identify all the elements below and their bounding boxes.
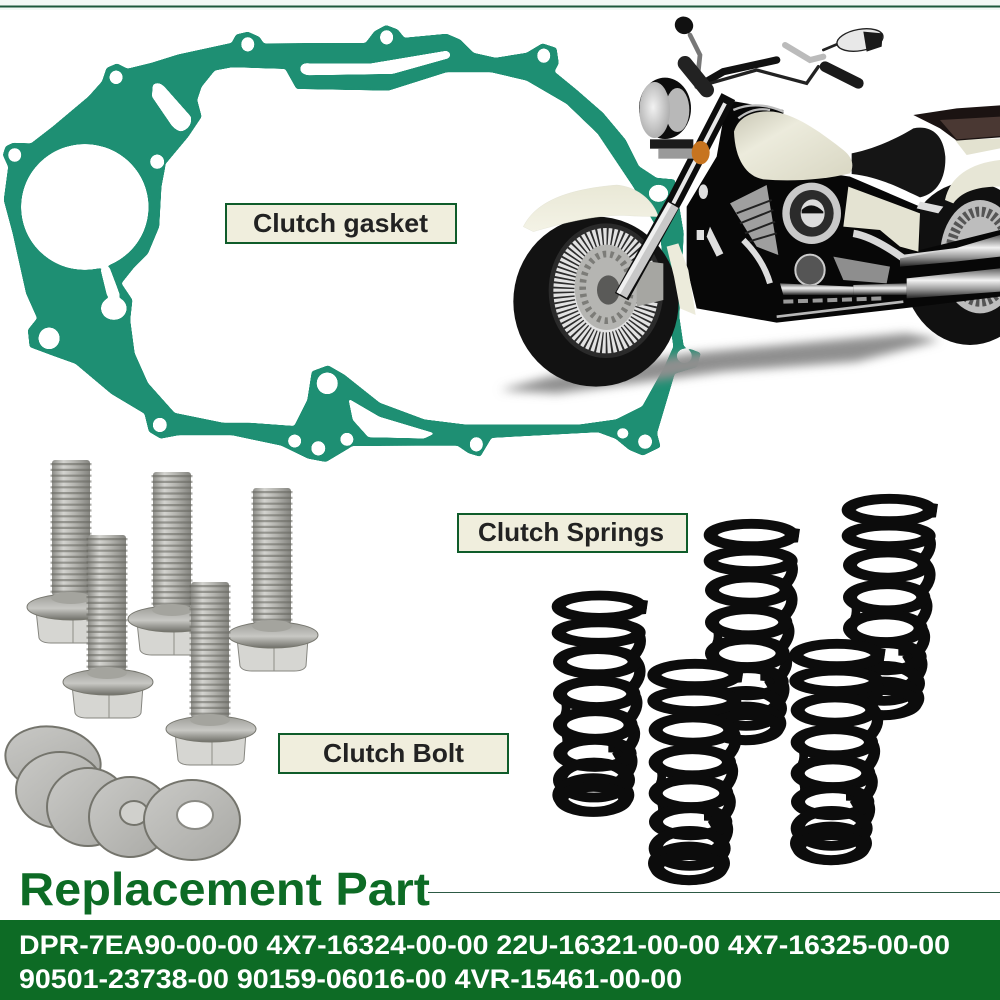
bolt 1 xyxy=(27,460,117,643)
spring back middle xyxy=(711,524,800,740)
washer 5 xyxy=(144,780,240,860)
fuel tank xyxy=(734,111,852,180)
part numbers line 1: DPR-7EA90-00-00 4X7-16324-00-00 22U-16321-00-00 4X7-16325-00-00 xyxy=(19,930,950,960)
crankcase and pipes details xyxy=(743,233,957,317)
heading: replacement part: Replacement Part xyxy=(19,863,430,915)
spring front left xyxy=(559,595,648,812)
engine cylinder fins xyxy=(730,185,778,255)
rear wheel xyxy=(902,182,1000,345)
clutch gasket label: Clutch gasket xyxy=(253,208,428,238)
clutch gasket label xyxy=(226,204,456,243)
spring front middle xyxy=(654,664,744,880)
spring back right xyxy=(849,499,938,715)
exhaust pipes xyxy=(780,235,1000,298)
washer 1 xyxy=(0,719,106,801)
left mirror xyxy=(672,14,696,37)
washer 4 xyxy=(89,777,171,857)
frame and engine block xyxy=(687,100,1000,323)
bolt 3 xyxy=(128,472,218,655)
clutch gasket xyxy=(4,26,700,461)
part numbers line 2: 90501-23738-00 90159-06016-00 4VR-15461-00-00 xyxy=(19,964,682,994)
bolt 4 xyxy=(166,582,256,765)
turn signal xyxy=(692,141,710,164)
bolts group xyxy=(27,460,318,765)
front wheel xyxy=(513,217,679,387)
footer part numbers band xyxy=(0,920,1000,1000)
spring front right xyxy=(796,644,886,860)
front fender xyxy=(523,185,658,232)
footer heading rule xyxy=(428,892,1000,893)
clutch springs label: Clutch Springs xyxy=(478,517,664,547)
cables above tank xyxy=(733,105,783,118)
ground shadow xyxy=(500,333,940,393)
bolt 5 xyxy=(228,488,318,671)
right mirror xyxy=(835,25,885,55)
washer 2 xyxy=(16,752,104,828)
clutch springs label xyxy=(458,514,687,552)
clutch cover chrome xyxy=(782,183,841,244)
clutch bolt label: Clutch Bolt xyxy=(323,738,464,768)
chrome highlights on frame xyxy=(697,184,943,257)
lower fender xyxy=(667,243,696,315)
seat xyxy=(852,128,945,197)
clutch bolt label xyxy=(279,734,508,773)
headlight xyxy=(639,78,695,159)
washers xyxy=(0,719,240,860)
washer 3 xyxy=(47,768,129,846)
bolt 2 xyxy=(63,535,153,718)
clutch springs xyxy=(559,499,938,880)
rear fender and seat xyxy=(913,105,1000,203)
top double rule xyxy=(0,0,1000,10)
side cover xyxy=(843,187,920,252)
motorcycle photo illustration xyxy=(500,14,1000,393)
handlebars xyxy=(685,35,858,90)
fork xyxy=(618,97,728,297)
